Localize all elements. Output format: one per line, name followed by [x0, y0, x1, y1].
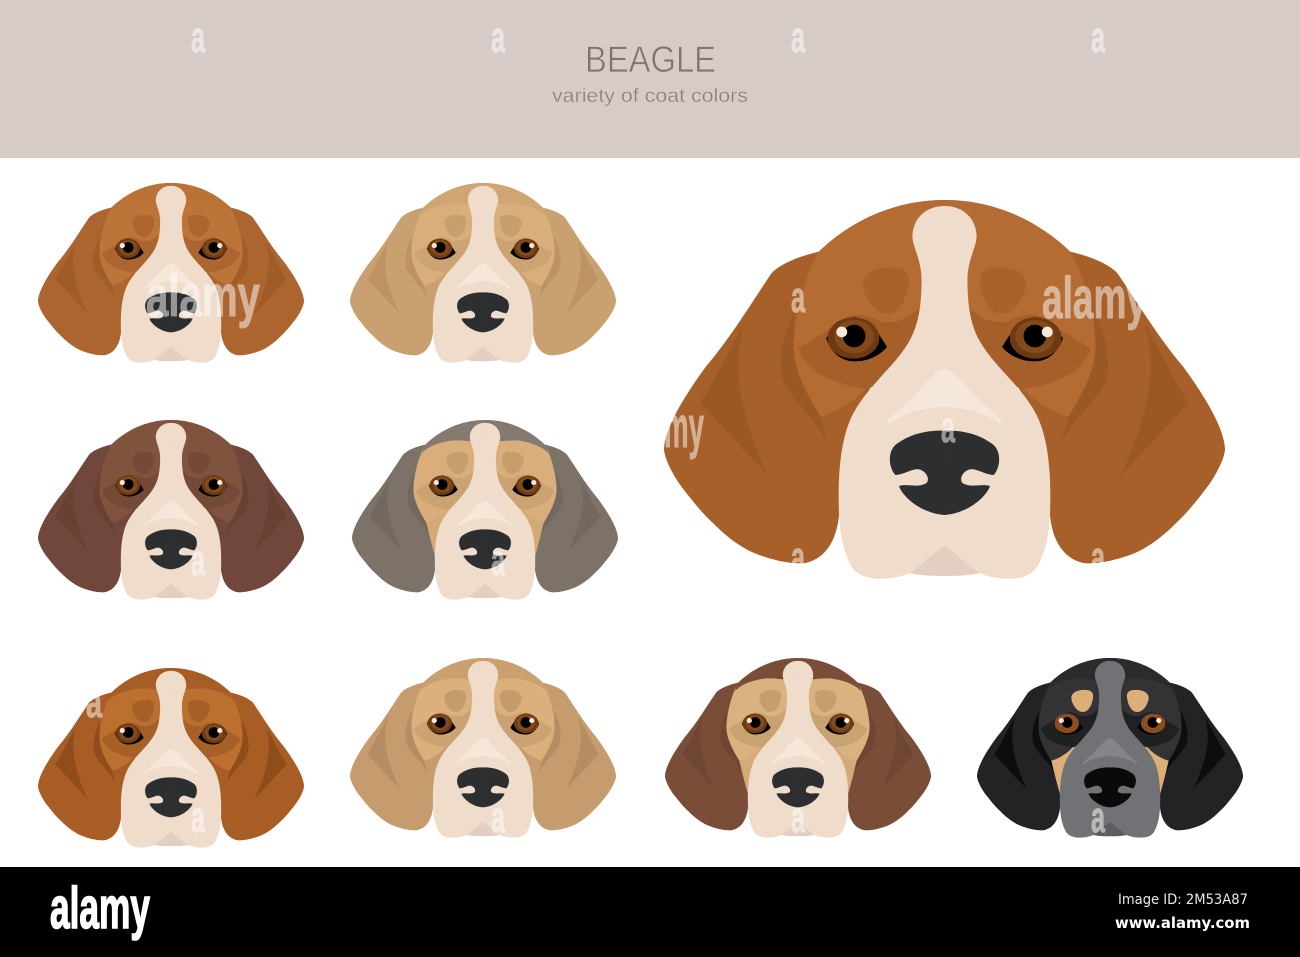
watermarks: a — [1091, 793, 1105, 842]
watermarks: a — [491, 793, 505, 842]
watermarks: alamy — [1042, 266, 1147, 331]
watermarks: a — [941, 403, 955, 452]
watermarks — [86, 13, 1147, 842]
watermarks: a — [1091, 13, 1105, 62]
watermarks: a — [791, 273, 805, 322]
portrait: brown tricolor — [665, 658, 931, 838]
watermarks: my — [664, 395, 704, 460]
portrait: black and tan with grey muzzle — [977, 658, 1243, 838]
portrait: grey tricolor — [352, 420, 618, 600]
large portrait: red and white beagle — [664, 200, 1225, 579]
subtitle: variety of coat colors — [552, 86, 748, 107]
watermarks: a — [1091, 533, 1105, 582]
header band — [0, 0, 1300, 158]
watermarks: a — [86, 678, 102, 727]
watermarks: a — [491, 536, 505, 585]
title: BEAGLE — [585, 39, 716, 80]
watermarks: a — [491, 13, 505, 62]
watermarks: a — [791, 533, 805, 582]
watermarks: alamy — [146, 264, 260, 329]
portrait: red and white — [38, 183, 304, 363]
watermarks: a — [791, 13, 805, 62]
watermarks: a — [191, 536, 205, 585]
website: www.alamy.com — [1115, 914, 1250, 932]
portrait: deep red — [38, 668, 304, 848]
portrait: chocolate and white — [38, 420, 304, 600]
watermarks: a — [191, 793, 205, 842]
footer logo: alamy — [50, 876, 150, 941]
watermarks: a — [191, 13, 205, 62]
watermarks: a — [791, 793, 805, 842]
portrait: tan and white — [350, 183, 616, 363]
portrait: fawn — [350, 658, 616, 838]
footer bar — [0, 867, 1300, 957]
image id: Image ID: 2M53A87 — [1118, 892, 1248, 908]
